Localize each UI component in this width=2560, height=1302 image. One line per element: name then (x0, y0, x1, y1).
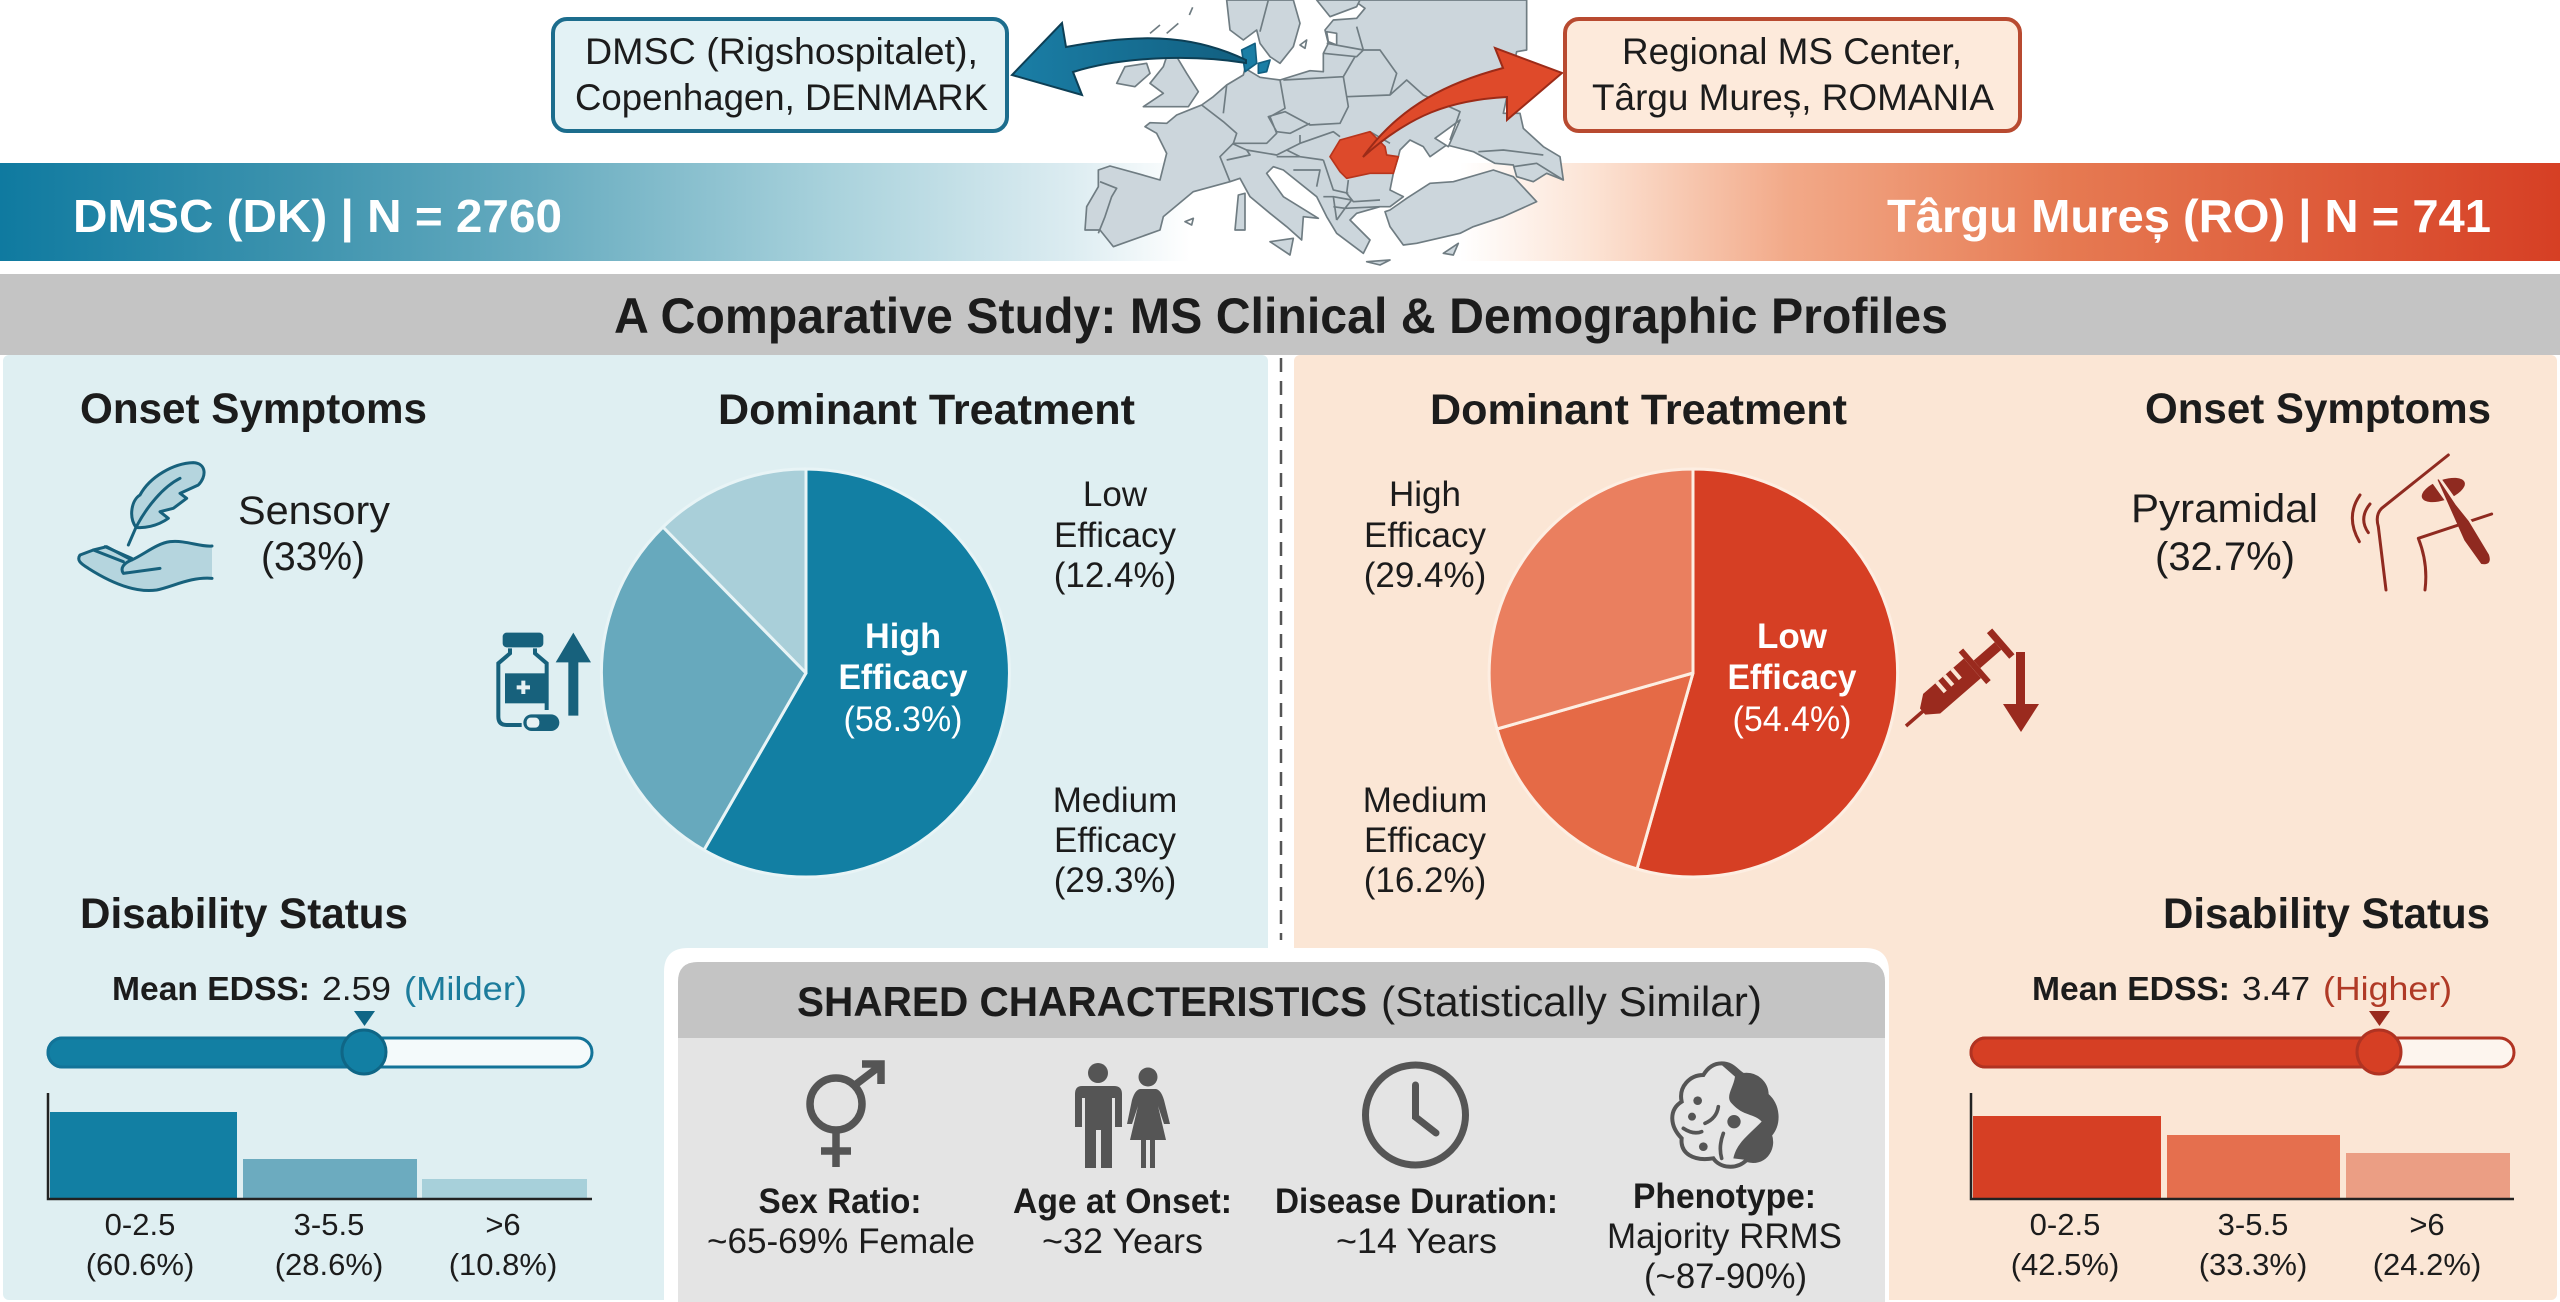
icon: brain (1672, 1063, 1777, 1167)
onset value: sensory: Sensory (238, 489, 390, 533)
bar chart: DMSC EDSS: (60.6%) (86, 1247, 194, 1282)
icon: clock (1366, 1065, 1466, 1165)
pie label: medium efficacy (1053, 781, 1177, 900)
EDSS slider DMSC (48, 1011, 592, 1074)
shared heading: SHARED CHARACTERISTICS (797, 978, 1367, 1025)
age at onset label: Age at Onset: (1013, 1182, 1232, 1221)
banner: Târgu Mureș gradient bar (1460, 163, 2560, 261)
pie label: medium efficacy (1363, 781, 1487, 900)
onset value: pyramidal: Pyramidal (2131, 487, 2318, 531)
pie label: low efficacy (1728, 617, 1857, 739)
bar chart: DMSC EDSS: (28.6%) (275, 1247, 383, 1282)
pie label: medium efficacy: (16.2%) (1364, 861, 1486, 900)
heading: dominant treatment Târgu Mureș: Dominant Treatment (1430, 386, 1847, 434)
location box: Târgu Mureș (1565, 19, 2020, 131)
bar chart: DMSC EDSS: >6 (485, 1207, 521, 1242)
mean EDSS DMSC: 2.59 (322, 970, 391, 1007)
bar chart: DMSC EDSS: 3-5.5 (294, 1207, 364, 1242)
icon: man and woman (1075, 1063, 1170, 1168)
location box: DMSC: DMSC (Rigshospitalet), (585, 31, 978, 72)
bar chart: DMSC EDSS: 0-2.5 (105, 1207, 175, 1242)
bar chart: DMSC EDSS: (10.8%) (449, 1247, 557, 1282)
mean EDSS DMSC: (Milder) (404, 970, 527, 1007)
location box: DMSC: Copenhagen, DENMARK (575, 77, 988, 118)
bar chart: Târgu Mureș EDSS: (24.2%) (2373, 1247, 2481, 1282)
divider (1280, 358, 1282, 940)
banner: DMSC gradient bar (0, 163, 1190, 261)
pie chart: Târgu Mureș treatment (1489, 469, 1898, 877)
bar chart: Târgu Mureș EDSS: >6 (2409, 1207, 2445, 1242)
location box: Târgu Mureș: Regional MS Center, (1622, 31, 1962, 72)
shared heading: (Statistically Similar) (1381, 978, 1762, 1025)
pie label: high efficacy: High (865, 617, 941, 656)
pie label: low efficacy: (54.4%) (1732, 700, 1852, 739)
phenotype label (1607, 1177, 1842, 1296)
heading: disability status DMSC: Disability Status (80, 890, 408, 938)
panel: shared characteristics (664, 948, 1889, 1302)
sex ratio label: ~65-69% Female (707, 1222, 975, 1261)
pie label: medium efficacy: Efficacy (1364, 821, 1486, 860)
icon: sex symbol (810, 1064, 881, 1167)
onset value: sensory: (33%) (261, 535, 365, 579)
shared heading (797, 978, 1762, 1025)
sex ratio label: Sex Ratio: (758, 1182, 922, 1221)
pie label: low efficacy: (12.4%) (1054, 556, 1176, 595)
panel: DMSC (3, 355, 1268, 1300)
phenotype label: (~87-90%) (1644, 1257, 1807, 1296)
bar chart: Târgu Mureș EDSS (1971, 1093, 2514, 1282)
pie label: high efficacy: Efficacy (838, 658, 968, 697)
banner label: DMSC N: DMSC (DK) | N = 2760 (73, 190, 562, 242)
pie label: medium efficacy: Medium (1363, 781, 1487, 820)
EDSS slider Târgu Mureș (1971, 1011, 2514, 1074)
pie label: high efficacy: Efficacy (1364, 516, 1486, 555)
icon: feather on hand (79, 463, 212, 591)
pie label: high efficacy (838, 617, 968, 739)
title band (0, 274, 2560, 355)
bar chart: Târgu Mureș EDSS: (33.3%) (2199, 1247, 2307, 1282)
heading: onset symptoms DMSC: Onset Symptoms (80, 385, 427, 433)
pie label: high efficacy: (29.4%) (1364, 556, 1486, 595)
sex ratio label (707, 1182, 975, 1261)
age at onset label (1013, 1182, 1232, 1261)
disease duration label: Disease Duration: (1275, 1182, 1558, 1221)
mean EDSS DMSC: Mean EDSS: (112, 970, 310, 1007)
age at onset label: ~32 Years (1042, 1222, 1203, 1261)
mean EDSS Târgu Mureș: 3.47 (2242, 970, 2310, 1007)
heading: dominant treatment DMSC: Dominant Treatment (718, 386, 1135, 434)
arrow: to Târgu Mureș (1363, 48, 1562, 157)
heading: onset symptoms Târgu Mureș: Onset Symptoms (2145, 385, 2491, 433)
location box: DMSC (553, 19, 1007, 131)
mean EDSS Târgu Mureș (2032, 970, 2452, 1007)
icon: syringe with down arrow (1892, 626, 2039, 742)
onset value: sensory (238, 489, 390, 579)
disease duration label: ~14 Years (1336, 1222, 1497, 1261)
bar chart: Târgu Mureș EDSS: (42.5%) (2011, 1247, 2119, 1282)
mean EDSS Târgu Mureș: (Higher) (2323, 970, 2452, 1007)
disease duration label (1275, 1182, 1558, 1261)
icon: medicine bottle with up arrow (498, 633, 591, 731)
bar chart: DMSC EDSS (48, 1093, 592, 1282)
mean EDSS Târgu Mureș: Mean EDSS: (2032, 970, 2230, 1007)
pie chart: DMSC treatment (601, 469, 1009, 877)
pie label: medium efficacy: Efficacy (1054, 821, 1176, 860)
panel: Târgu Mureș (1294, 355, 2557, 1300)
mean EDSS DMSC (112, 970, 527, 1007)
pie label: low efficacy (1054, 475, 1176, 595)
map of Europe (1085, 0, 1563, 265)
bar chart: Târgu Mureș EDSS: 3-5.5 (2218, 1207, 2288, 1242)
pie label: low efficacy: Efficacy (1054, 516, 1176, 555)
pie label: low efficacy: Efficacy (1728, 658, 1857, 697)
banner label: Târgu Mureș N: Târgu Mureș (RO) | N = 741 (1887, 190, 2491, 243)
onset value: pyramidal: (32.7%) (2155, 535, 2295, 579)
pie label: high efficacy: High (1389, 475, 1461, 514)
pie label: low efficacy: Low (1757, 617, 1828, 656)
onset value: pyramidal (2131, 487, 2318, 579)
pie label: low efficacy: Low (1083, 475, 1148, 514)
phenotype label: Phenotype: (1633, 1177, 1816, 1216)
location box: Târgu Mureș: Târgu Mureș, ROMANIA (1592, 77, 1994, 118)
pie label: high efficacy (1364, 475, 1486, 595)
icon: knee reflex hammer (2352, 455, 2492, 590)
pie label: high efficacy: (58.3%) (844, 700, 962, 739)
pie label: medium efficacy: Medium (1053, 781, 1177, 820)
heading: disability status Târgu Mureș: Disability Status (2163, 890, 2490, 938)
title band: A Comparative Study: MS Clinical & Demographic Profiles (614, 288, 1948, 344)
phenotype label: Majority RRMS (1607, 1217, 1842, 1256)
bar chart: Târgu Mureș EDSS: 0-2.5 (2030, 1207, 2100, 1242)
arrow: to Copenhagen (1012, 23, 1246, 95)
pie label: medium efficacy: (29.3%) (1054, 861, 1176, 900)
